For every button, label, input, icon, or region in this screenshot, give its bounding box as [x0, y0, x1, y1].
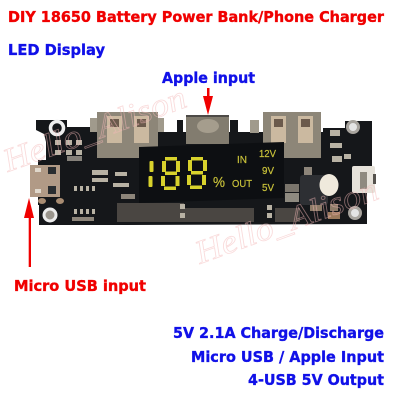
circuit board — [30, 112, 376, 225]
watermark: lower Hello_Alison: Hello_Alison — [189, 172, 383, 272]
side switch — [352, 166, 376, 193]
feature: outputs: 4-USB 5V Output — [248, 371, 384, 389]
arrow: Micro USB input — [24, 198, 34, 267]
title: DIY 18650 Battery Power Bank/Phone Charger — [8, 8, 385, 26]
feature list — [173, 324, 384, 389]
mounting hole: top right — [348, 122, 358, 132]
arrow: Apple input — [203, 88, 213, 115]
label 9V: 9V — [262, 165, 274, 177]
white capacitor — [320, 174, 338, 196]
PCB base — [36, 120, 372, 225]
mounting hole: top left — [50, 122, 64, 134]
label 5V: 5V — [262, 182, 274, 194]
watermark: upper Hello_Alison: Hello_Alison — [0, 80, 191, 180]
Apple input port — [186, 115, 229, 144]
label OUT: OUT — [232, 178, 253, 190]
solder pads and components — [55, 130, 351, 221]
grey strip under display — [117, 203, 300, 222]
mounting hole: bottom right — [350, 208, 360, 218]
label IN: IN — [237, 154, 247, 166]
LED display panel — [139, 142, 284, 203]
mounting hole: bottom left — [44, 209, 56, 221]
digit 8 — [187, 157, 207, 189]
inductor — [300, 175, 328, 205]
feature: inputs: Micro USB / Apple Input — [191, 348, 384, 366]
percent sign: % — [213, 174, 225, 191]
feature: charge and discharge: 5V 2.1A Charge/Discharge — [173, 324, 384, 342]
heading: LED Display: LED Display — [8, 41, 105, 59]
label 12V: 12V — [259, 148, 276, 160]
digit 8 — [161, 157, 180, 190]
USB port: right — [250, 112, 321, 158]
label: Apple input: Apple input — [162, 69, 255, 87]
label: Micro USB input: Micro USB input — [14, 277, 146, 295]
micro USB connector — [30, 165, 64, 204]
USB port: left — [90, 112, 164, 158]
digit 1 — [148, 161, 154, 187]
